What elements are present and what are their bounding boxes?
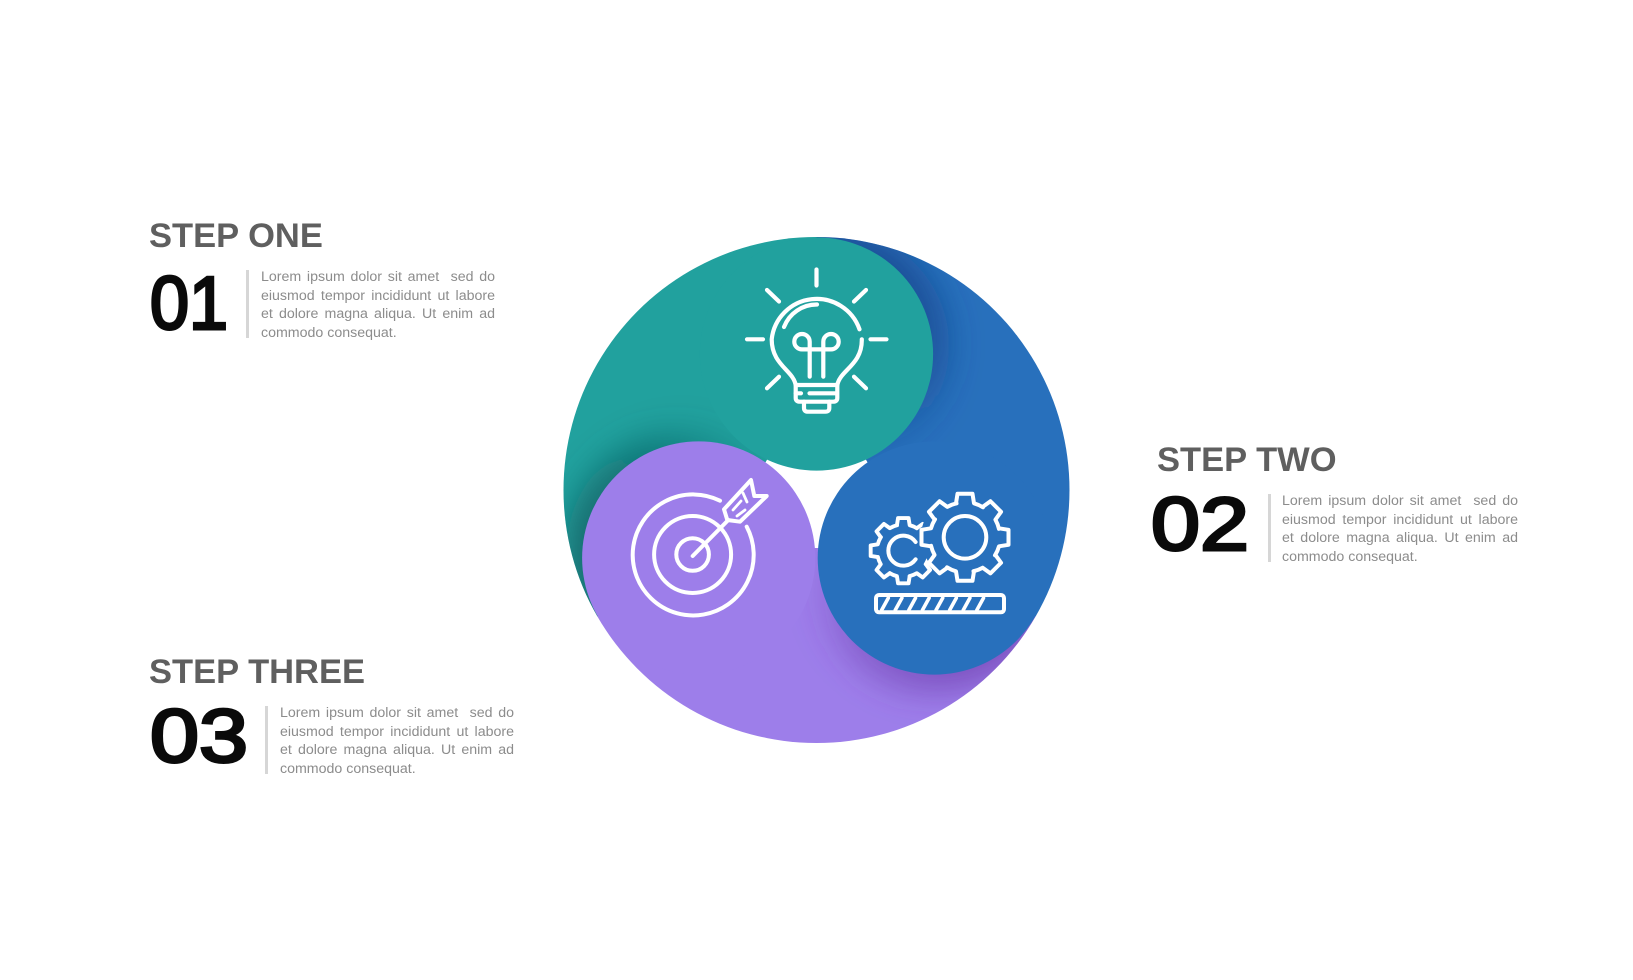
icon: light bulb [747,270,886,412]
icon: target with arrow [633,480,767,615]
segment: purple outer band [597,490,1036,743]
text block: step three: et dolore magna aliqua. Ut enim ad [280,742,514,758]
shadow: teal lobe on blue band [816,237,958,432]
heading: step three: STEP THREE [149,653,365,691]
shadow: blue lobe on purple band [820,584,1036,705]
text block: step two: et dolore magna aliqua. Ut enim ad [1282,530,1518,546]
number 01: 01 [150,261,228,345]
shadow: purple lobe on teal band [564,423,740,616]
centre gap [716,374,917,548]
lobe: blue [818,441,1051,675]
text block: step three: eiusmod tempor incididunt ut labore [280,724,514,740]
segment: blue outer band [816,237,1069,616]
text block: step two: Lorem ipsum dolor sit amet sed do [1282,493,1518,509]
text block: step one: et dolore magna aliqua. Ut enim ad [261,306,495,322]
text block: step two: commodo consequat. [1282,549,1418,565]
text block: step one: Lorem ipsum dolor sit amet sed do [261,269,495,285]
number 02: 02 [1151,482,1249,566]
text block: step one: commodo consequat. [261,325,397,341]
text block: step two: eiusmod tempor incididunt ut labore [1282,512,1518,528]
text block: step one: eiusmod tempor incididunt ut labore [261,288,495,304]
text block: step one [261,269,495,341]
heading: step one: STEP ONE [149,217,323,255]
panel: step three [149,653,514,778]
heading: step two: STEP TWO [1157,441,1337,479]
divider [1268,494,1271,562]
lobe: purple [582,441,815,675]
panel: step one [149,217,495,345]
text block: step three: Lorem ipsum dolor sit amet sed do [280,705,514,721]
icon: gears with progress bar [871,494,1008,612]
panel: step two [1151,441,1518,566]
text block: step two [1282,493,1518,565]
text block: step three [280,705,514,777]
divider [265,706,268,774]
divider [246,270,249,338]
segment: teal outer band [564,237,816,616]
text block: step three: commodo consequat. [280,761,416,777]
lobe: teal [700,237,933,471]
diagram: three-part swirl circle [564,237,1070,743]
number 03: 03 [150,694,248,778]
